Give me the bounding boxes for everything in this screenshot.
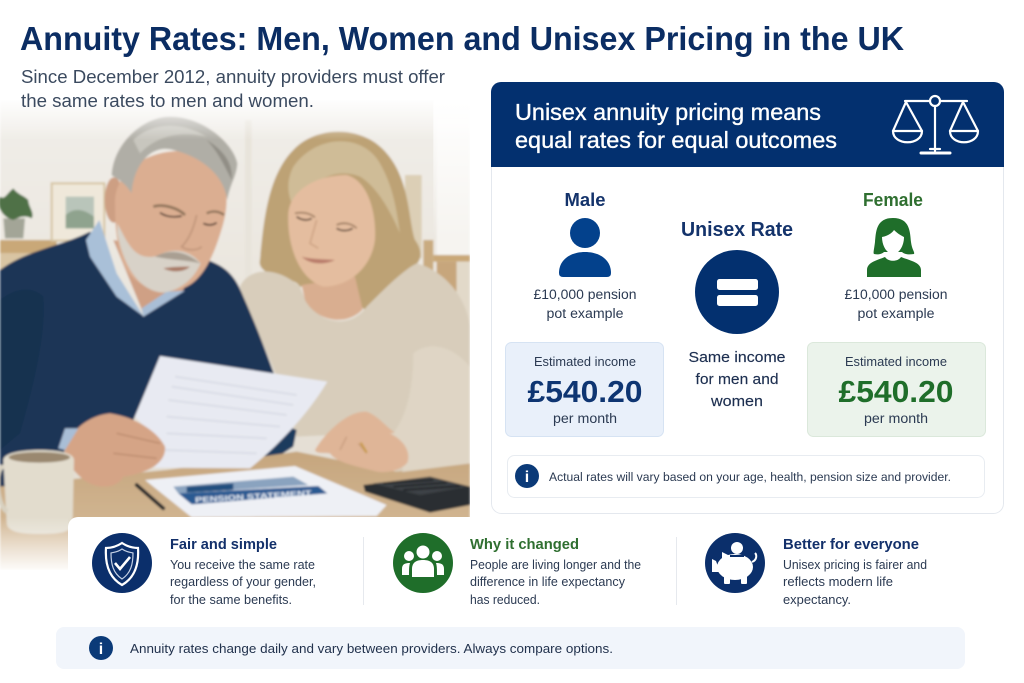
footer note: Annuity rates change daily and vary between providers. Always compare options. xyxy=(130,641,613,656)
man beard xyxy=(117,223,201,293)
man sweater xyxy=(0,232,275,490)
calculator xyxy=(363,477,470,513)
female heading: Female xyxy=(863,190,923,210)
woman face xyxy=(288,175,375,287)
benefit: fair and simple xyxy=(92,533,316,607)
benefit: better for everyone: Better for everyone xyxy=(783,536,919,553)
benefit: better for everyone: Unisex pricing is fairer and xyxy=(783,558,927,572)
man face xyxy=(115,151,227,291)
subtitle: the same rates to men and women. xyxy=(21,90,314,111)
man collar xyxy=(86,220,143,316)
man hair xyxy=(112,117,237,200)
man ear xyxy=(105,177,123,223)
male column xyxy=(506,190,664,436)
icon: female person xyxy=(867,218,921,277)
female income box: Estimated income xyxy=(845,355,947,369)
paper xyxy=(135,356,327,468)
panel header xyxy=(491,82,1004,167)
panel: benefits strip xyxy=(68,514,1010,610)
statement document xyxy=(145,466,387,517)
panel note xyxy=(508,456,984,498)
subtitle xyxy=(21,66,445,111)
female income box: per month xyxy=(864,411,928,426)
table xyxy=(0,452,470,570)
unisex note: for men and xyxy=(696,371,778,388)
benefit: fair and simple: Fair and simple xyxy=(170,536,277,553)
female pension example: pot example xyxy=(858,306,934,321)
unisex heading: Unisex Rate xyxy=(681,218,793,241)
mug xyxy=(3,450,74,534)
benefit: why it changed: People are living longer and the xyxy=(470,558,641,572)
unisex note: women xyxy=(710,393,763,410)
male income box: Estimated income xyxy=(534,355,636,369)
male pension example: £10,000 pension xyxy=(534,287,636,302)
female column xyxy=(808,190,986,436)
benefit: fair and simple: regardless of your gender, xyxy=(170,575,316,589)
footer note xyxy=(56,627,965,669)
male income box: per month xyxy=(553,411,617,426)
woman hair xyxy=(260,132,420,311)
female income box: £540.20 xyxy=(838,374,954,409)
benefit: better for everyone: reflects modern life xyxy=(783,575,893,589)
man hand xyxy=(65,413,165,487)
icon: male person xyxy=(559,218,611,277)
unisex note xyxy=(688,349,786,410)
footer note: i xyxy=(99,641,103,658)
male heading: Male xyxy=(564,190,606,210)
male pension example xyxy=(534,287,636,321)
subtitle: Since December 2012, annuity providers must offer xyxy=(21,66,445,87)
panel note: Actual rates will vary based on your age, health, pension size and provider. xyxy=(549,470,951,484)
female pension example xyxy=(844,287,948,321)
photo: couple reviewing a pension statement: PENSION STATEMENT xyxy=(195,488,312,505)
icon: shield xyxy=(92,533,152,593)
woman sweater xyxy=(240,263,470,473)
panel header: Unisex annuity pricing means xyxy=(515,99,821,125)
icon: people xyxy=(393,533,453,593)
female pension example: £10,000 pension xyxy=(844,287,948,302)
benefit: better for everyone xyxy=(705,533,927,607)
panel header: equal rates for equal outcomes xyxy=(515,127,837,153)
male pension example: pot example xyxy=(546,306,624,321)
benefit: fair and simple: You receive the same rate xyxy=(170,558,315,572)
pen xyxy=(137,485,163,508)
female income box xyxy=(808,342,986,436)
benefit: better for everyone: expectancy. xyxy=(783,593,851,607)
benefit: fair and simple: for the same benefits. xyxy=(170,593,292,607)
top fade xyxy=(0,100,434,138)
man neck xyxy=(112,239,186,310)
benefit: why it changed: Why it changed xyxy=(470,536,579,553)
panel note: i xyxy=(525,469,529,486)
panel: unisex annuity pricing xyxy=(491,82,1004,514)
title: Annuity Rates: Men, Women and Unisex Pricing in the UK xyxy=(20,20,904,57)
icon: piggy bank xyxy=(705,533,765,593)
man features xyxy=(153,206,185,215)
photo: couple reviewing a pension statement xyxy=(0,97,470,573)
woman neck xyxy=(302,277,363,320)
male income box xyxy=(506,342,664,436)
male income box: £540.20 xyxy=(528,374,642,409)
icon: equals xyxy=(695,250,779,334)
unisex note: Same income xyxy=(688,349,786,366)
icon: scales xyxy=(893,96,978,153)
unisex column xyxy=(681,218,793,410)
bottom left fade xyxy=(0,521,68,570)
benefit: why it changed xyxy=(393,533,641,607)
woman hand xyxy=(315,412,411,472)
benefit: why it changed: difference in life expectancy xyxy=(470,575,626,589)
benefit: why it changed: has reduced. xyxy=(470,593,540,607)
